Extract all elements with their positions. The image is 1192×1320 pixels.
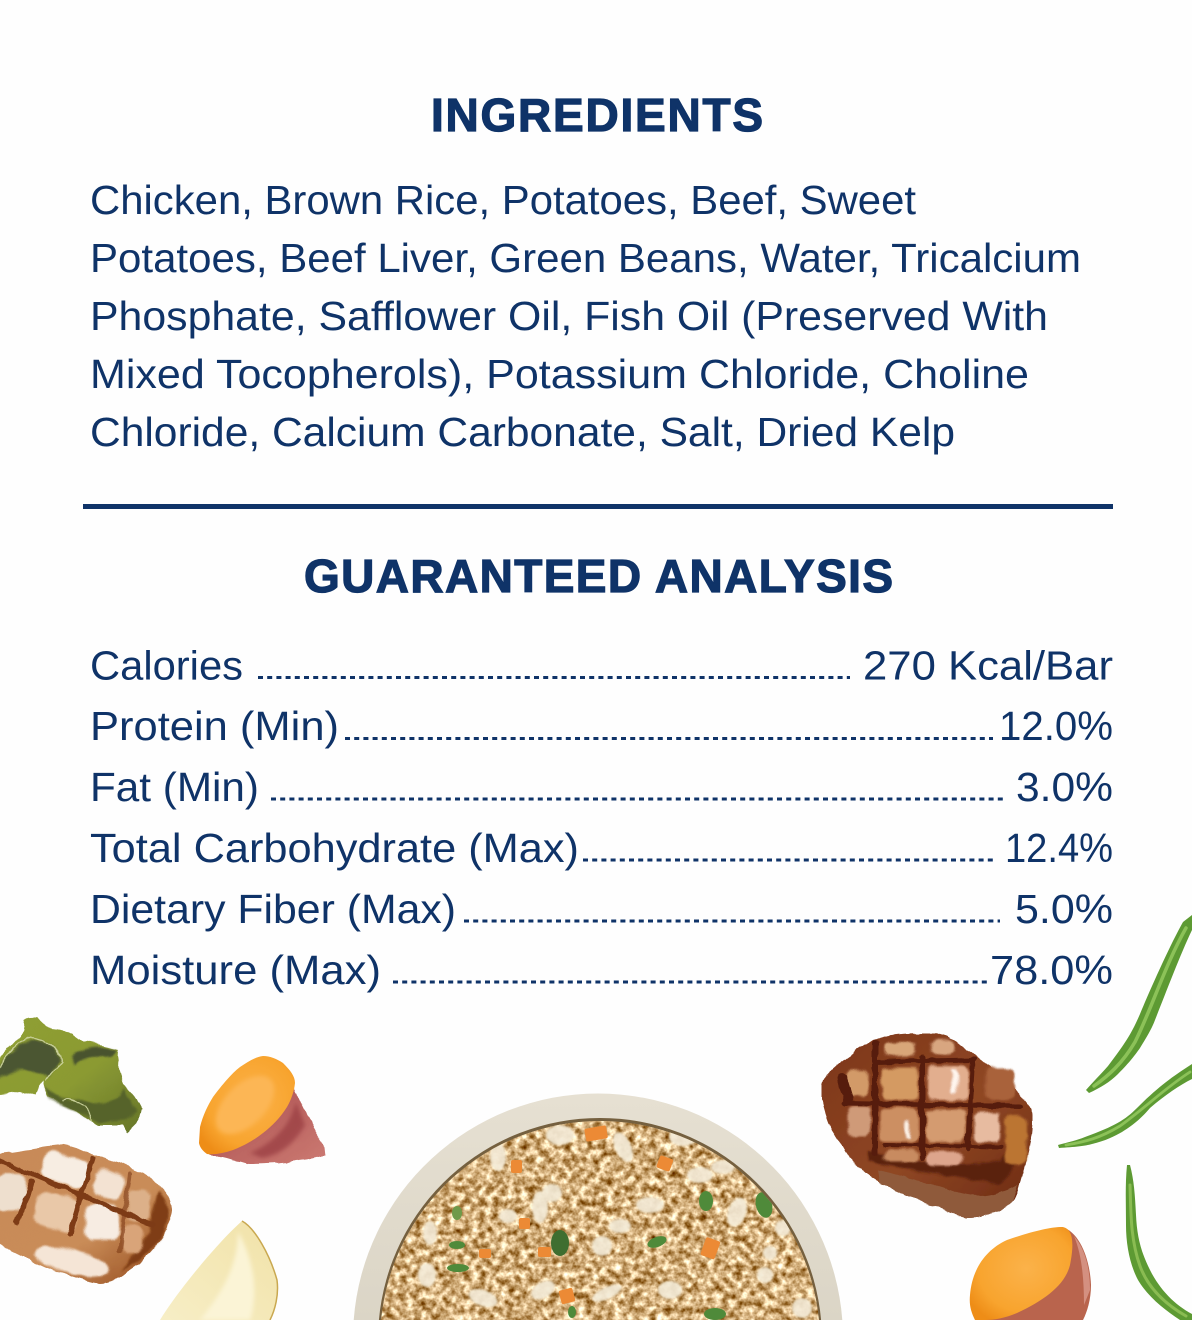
illustration: potato wedge <box>160 1221 278 1320</box>
illustration: green bean middle <box>1058 1064 1192 1148</box>
row: dietary fiber <box>90 886 1113 932</box>
row: protein: 12.0% <box>999 703 1113 749</box>
heading: ingredients: INGREDIENTS <box>431 89 763 141</box>
illustration: kelp <box>0 1017 141 1133</box>
row: calories <box>90 642 1113 688</box>
ingredients text block: Phosphate, Safflower Oil, Fish Oil (Preserved With <box>90 293 1048 339</box>
ingredients text block <box>90 177 1081 455</box>
food: green vegetable pieces <box>447 1190 775 1320</box>
row: total carbohydrate: 12.4% <box>1005 825 1113 871</box>
row: total carbohydrate: Total Carbohydrate (Max) <box>90 825 579 871</box>
illustration: grilled chicken <box>0 1145 172 1284</box>
illustration: sweet potato left <box>199 1056 326 1164</box>
row: fat <box>90 764 1113 810</box>
bowl rim <box>354 1094 842 1320</box>
illustration: green bean lower <box>1126 1165 1192 1320</box>
row: moisture: 78.0% <box>990 947 1113 993</box>
guaranteed analysis table <box>90 642 1113 993</box>
illustration: bowl of food <box>354 1094 842 1320</box>
ingredients text block: Chicken, Brown Rice, Potatoes, Beef, Sweet <box>90 177 917 223</box>
food fill <box>381 1121 819 1320</box>
row: total carbohydrate <box>90 825 1113 871</box>
row: protein <box>90 703 1113 749</box>
food: rice and chicken pieces <box>418 1125 812 1318</box>
illustration: green bean top <box>1086 915 1192 1093</box>
row: dietary fiber: 5.0% <box>1015 886 1113 932</box>
row: moisture: Moisture (Max) <box>90 947 381 993</box>
row: dietary fiber: Dietary Fiber (Max) <box>90 886 456 932</box>
heading: guaranteed analysis: GUARANTEED ANALYSIS <box>304 550 893 602</box>
ingredients text block: Mixed Tocopherols), Potassium Chloride, Choline <box>90 351 1029 397</box>
illustration: grilled beef <box>822 1033 1033 1217</box>
row: calories: 270 Kcal/Bar <box>863 642 1113 688</box>
row: fat: Fat (Min) <box>90 764 259 810</box>
row: fat: 3.0% <box>1016 764 1113 810</box>
illustration: sweet potato right <box>970 1227 1091 1320</box>
food: orange carrot pieces <box>479 1125 721 1305</box>
row: moisture <box>90 947 1113 993</box>
ingredients text block: Potatoes, Beef Liver, Green Beans, Water, Tricalcium <box>90 235 1081 281</box>
row: calories: Calories <box>90 642 243 688</box>
row: protein: Protein (Min) <box>90 703 339 749</box>
ingredients text block: Chloride, Calcium Carbonate, Salt, Dried Kelp <box>90 409 955 455</box>
